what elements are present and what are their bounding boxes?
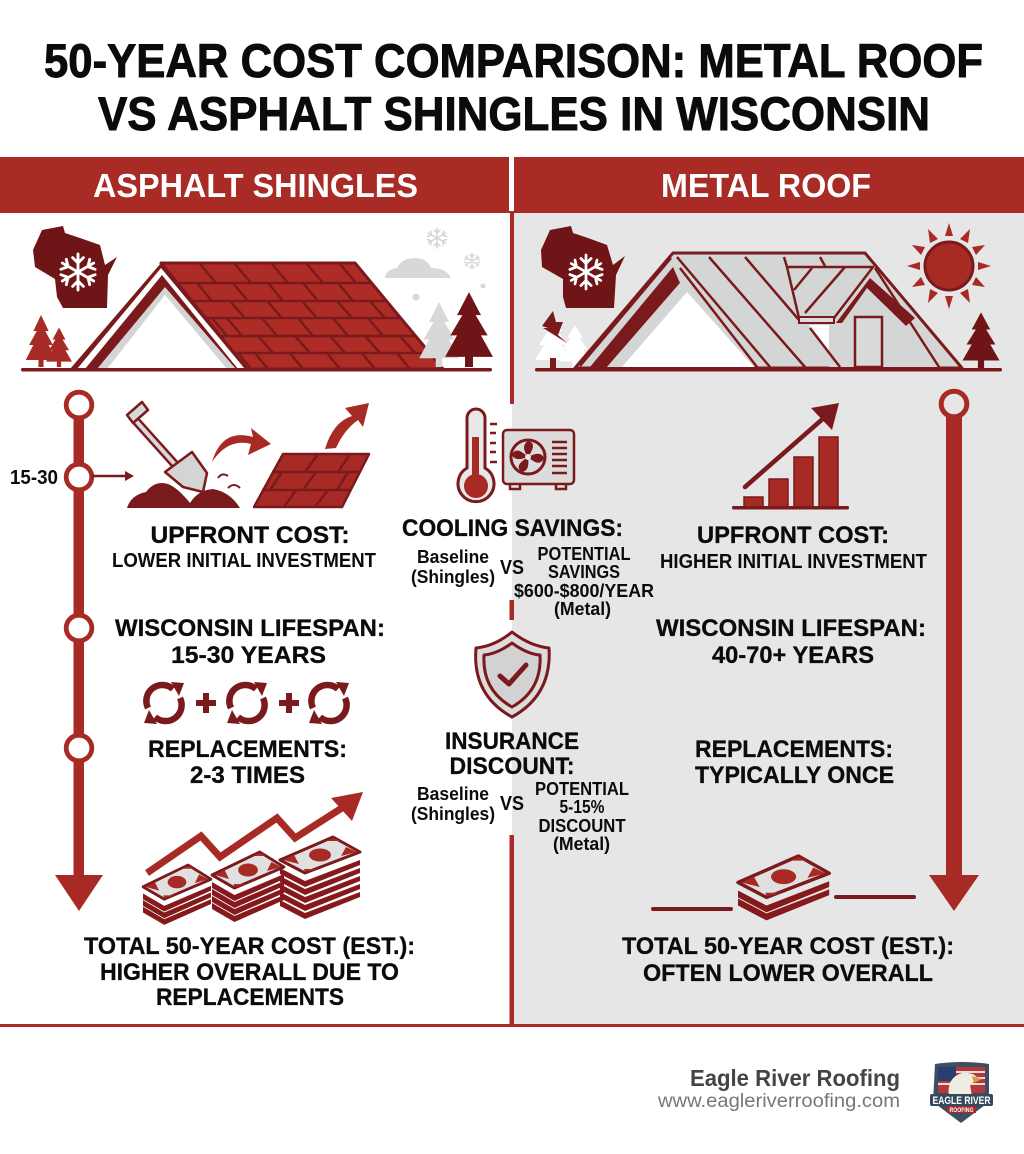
header band: metal roof	[514, 157, 1024, 212]
text: insurance discount: 5-15%	[560, 797, 604, 817]
text: upfront cost (left): UPFRONT COST:	[150, 522, 350, 549]
header band: metal roof: METAL ROOF	[661, 167, 871, 204]
text: insurance discount: (Metal)	[553, 834, 610, 854]
text: cooling savings: (Shingles)	[411, 567, 495, 587]
text: cooling savings: $600-$800/YEAR	[514, 581, 654, 601]
header band: asphalt shingles: ASPHALT SHINGLES	[93, 167, 418, 204]
text: insurance discount: POTENTIAL	[535, 779, 629, 799]
text: replacements (right)	[695, 736, 894, 789]
label: 15-30 marker	[10, 467, 134, 489]
icon: white and red trees (right side)	[535, 311, 591, 368]
title: VS ASPHALT SHINGLES IN WISCONSIN	[98, 87, 930, 140]
text: Wisconsin lifespan (right)	[656, 615, 926, 669]
icon: shingle patch	[254, 454, 369, 507]
text: total cost (left)	[84, 933, 415, 1011]
icon: one money stack with flat line	[651, 856, 916, 920]
text: cooling savings	[402, 515, 654, 619]
icon: AC unit	[503, 430, 574, 489]
text: upfront cost (left): LOWER INITIAL INVESTMENT	[112, 550, 376, 572]
text: replacements (right): TYPICALLY ONCE	[695, 762, 894, 789]
icon: dark tree (left)	[445, 292, 493, 367]
icon: Eagle River Roofing logo	[930, 1062, 993, 1123]
icon: curved arrow to shingles	[212, 428, 271, 462]
text: cooling savings: SAVINGS	[548, 562, 620, 582]
text: total cost (right): OFTEN LOWER OVERALL	[643, 960, 933, 987]
text: insurance discount: DISCOUNT:	[450, 753, 574, 780]
icon: three money stacks	[143, 837, 360, 925]
text: insurance discount: (Shingles)	[411, 804, 495, 824]
icon: dark tree (right)	[962, 312, 1000, 368]
text: cooling savings: POTENTIAL	[538, 544, 631, 564]
text: upfront cost (right)	[660, 522, 927, 573]
icon: shovel and dirt	[127, 402, 240, 508]
text: replacements (right): REPLACEMENTS:	[695, 736, 893, 763]
timeline arrow: metal roof	[929, 391, 979, 911]
text: cooling savings: (Metal)	[554, 599, 611, 619]
icon: rising bar chart	[732, 403, 849, 510]
text: insurance discount: INSURANCE	[445, 728, 579, 755]
text: Wisconsin lifespan (left)	[115, 615, 385, 669]
text: total cost (left): REPLACEMENTS	[156, 984, 344, 1011]
text: replacements (left): REPLACEMENTS:	[148, 736, 347, 763]
text: Wisconsin lifespan (right): WISCONSIN LIFESPAN:	[656, 615, 926, 642]
text: replacements (left): 2-3 TIMES	[190, 762, 305, 789]
text: insurance discount: DISCOUNT	[538, 816, 626, 836]
footer: company name and website: www.eagleriverroofing.com	[657, 1091, 900, 1112]
icon: Wisconsin map with snowflake (left)	[33, 226, 117, 308]
text: Wisconsin lifespan (left): WISCONSIN LIFESPAN:	[115, 615, 385, 642]
icon: Wisconsin map with snowflake (right)	[541, 226, 625, 308]
text: Wisconsin lifespan (right): 40-70+ YEARS	[712, 642, 874, 669]
icon: Eagle River Roofing logo: EAGLE RIVER	[932, 1095, 991, 1107]
text: total cost (left): TOTAL 50-YEAR COST (EST.):	[84, 933, 415, 960]
icon: shield with check	[476, 632, 549, 717]
timeline arrow: asphalt shingles	[55, 392, 103, 911]
text: total cost (right): TOTAL 50-YEAR COST (EST.):	[622, 933, 954, 960]
text: Wisconsin lifespan (left): 15-30 YEARS	[171, 642, 326, 669]
text: cooling savings: COOLING SAVINGS:	[402, 515, 623, 542]
icon: red trees	[26, 315, 72, 367]
text: insurance discount: VS	[500, 793, 524, 815]
icon: gray cloud and snow	[385, 228, 486, 367]
text: insurance discount: Baseline	[417, 784, 489, 804]
text: insurance discount	[411, 728, 629, 854]
text: upfront cost (left)	[112, 522, 376, 572]
text: replacements (left)	[148, 736, 347, 789]
text: cooling savings: Baseline	[417, 547, 489, 567]
text: upfront cost (right): UPFRONT COST:	[697, 522, 889, 549]
panel background: metal roof side	[512, 212, 1024, 1024]
text: total cost (left): HIGHER OVERALL DUE TO	[100, 959, 399, 986]
icon: asphalt shingle roof	[70, 263, 443, 369]
icon: three replacement cycles	[144, 682, 349, 724]
icon: metal roof	[575, 253, 962, 368]
title	[44, 34, 983, 140]
footer: company name and website: Eagle River Roofing	[690, 1065, 900, 1091]
text: upfront cost (right): HIGHER INITIAL INVESTMENT	[660, 551, 927, 573]
label: 15-30 marker: 15-30	[10, 467, 58, 489]
icon: sun	[907, 223, 991, 309]
icon: up arrow	[325, 403, 369, 449]
text: cooling savings: VS	[500, 557, 524, 579]
icon: Eagle River Roofing logo: ROOFING	[950, 1108, 974, 1114]
header band: asphalt shingles	[0, 157, 509, 212]
text: total cost (right)	[622, 933, 954, 987]
icon: thermometer	[458, 409, 497, 502]
icon: zigzag rising arrow	[147, 792, 363, 873]
footer: company name and website	[657, 1065, 900, 1112]
